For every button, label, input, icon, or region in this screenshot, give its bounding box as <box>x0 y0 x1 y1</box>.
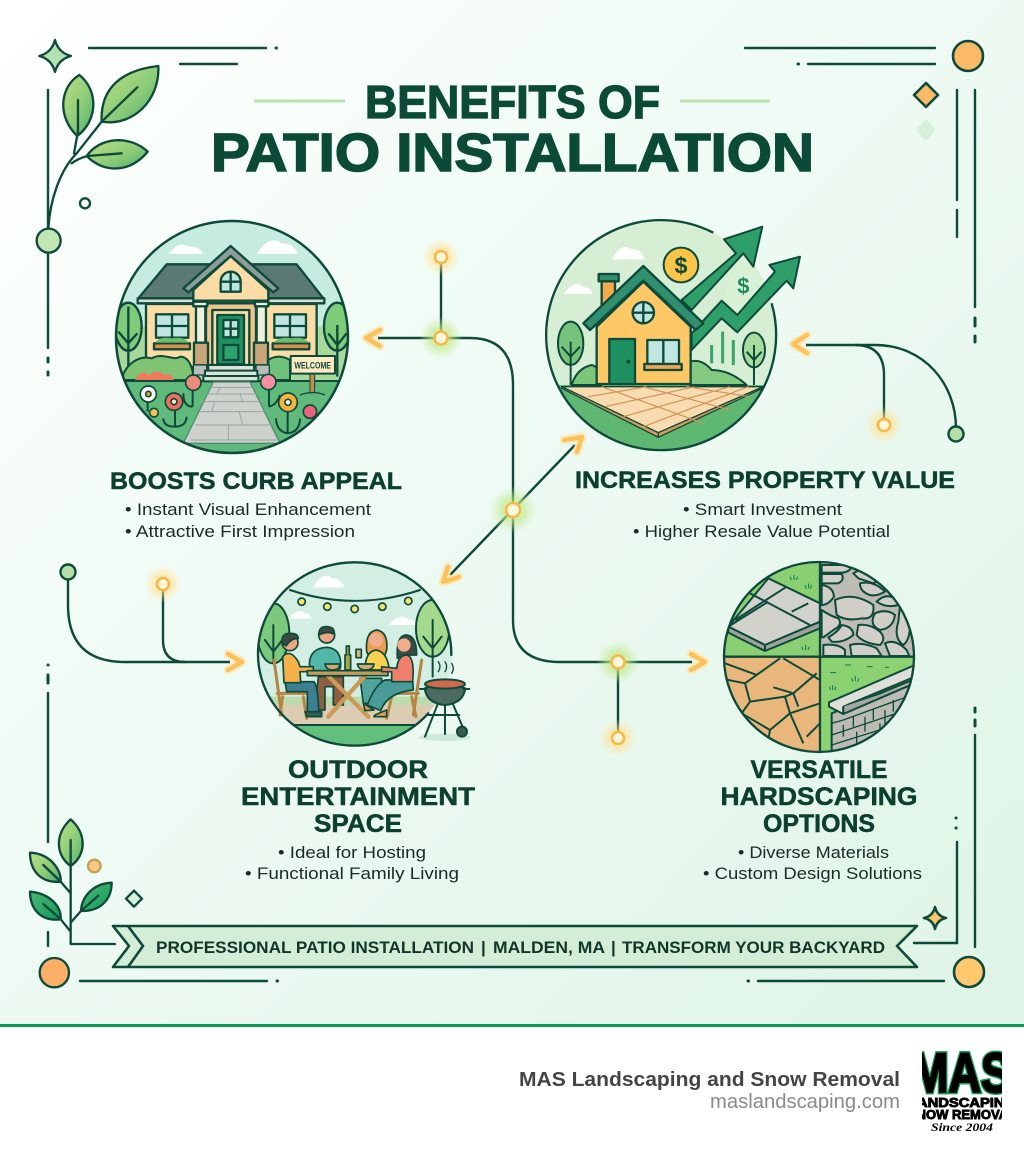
title <box>211 76 814 183</box>
bullets: entertainment <box>245 843 459 883</box>
frame: bottom-left corner <box>48 665 278 981</box>
bullets: hardscaping <box>703 843 922 883</box>
heading: increases property value: INCREASES PROPERTY VALUE <box>575 467 955 494</box>
frame: top-right corner <box>745 48 975 342</box>
bullets: hardscaping: • Custom Design Solutions <box>703 864 922 883</box>
logo: SNOW REMOVAL <box>908 1107 1016 1122</box>
illustration: house with rising arrows: $ <box>737 273 749 298</box>
icon: dollar coin <box>664 248 698 282</box>
illustration: house with rising arrows <box>543 217 800 457</box>
icon: barbecue grill <box>419 662 471 741</box>
banner ribbon <box>113 926 917 967</box>
person: teal shirt <box>309 627 343 710</box>
frame: bottom-right corner <box>748 708 975 981</box>
bullets: curb appeal <box>125 500 371 541</box>
panel: versatile hardscaping options <box>703 560 922 883</box>
banner ribbon: | <box>481 938 486 957</box>
heading: outdoor entertainment space: SPACE <box>314 810 402 838</box>
banner ribbon: | <box>611 938 616 957</box>
title: PATIO INSTALLATION <box>211 123 814 183</box>
heading: boosts curb appeal: BOOSTS CURB APPEAL <box>110 468 402 495</box>
footer company name: MAS Landscaping and Snow Removal <box>519 1068 900 1091</box>
upward arrow zigzag <box>692 257 800 350</box>
logo: Since 2004 <box>931 1120 993 1134</box>
banner ribbon: PROFESSIONAL PATIO INSTALLATION <box>156 938 474 957</box>
quadrant: concrete pavers <box>725 563 819 656</box>
heading: outdoor entertainment space <box>241 756 475 838</box>
frame: top-left corner <box>48 48 276 375</box>
upward arrow large <box>682 227 762 310</box>
footer website: maslandscaping.com <box>710 1091 900 1113</box>
heading: versatile hardscaping options: HARDSCAPING <box>720 783 918 811</box>
panel: increases property value <box>543 217 955 541</box>
person: orange shirt <box>282 633 322 717</box>
panel: boosts curb appeal <box>110 220 402 541</box>
connectors: right curves <box>806 345 956 428</box>
bullets: property value: • Higher Resale Value Potential <box>633 522 890 541</box>
illustration: four hardscape materials <box>720 560 920 753</box>
title: BENEFITS OF <box>365 76 660 128</box>
illustration: friends dining outdoors <box>250 553 471 753</box>
glow nodes <box>60 238 964 757</box>
icon: top-right circle and diamonds <box>914 41 983 139</box>
bullets: hardscaping: • Diverse Materials <box>738 843 889 862</box>
icon: bottom-right circle and star <box>924 907 984 987</box>
icon: bottom-left sprout <box>30 819 142 987</box>
quadrant: retaining wall <box>821 658 913 751</box>
bullets: curb appeal: • Attractive First Impression <box>125 522 355 541</box>
illustration: house with garden: WELCOME <box>294 360 331 370</box>
circle outline <box>546 220 776 450</box>
heading: versatile hardscaping options: OPTIONS <box>763 810 875 838</box>
icon: dollar coin: $ <box>674 252 687 278</box>
heading: versatile hardscaping options: VERSATILE <box>750 756 888 784</box>
bullets: entertainment: • Functional Family Living <box>245 864 459 883</box>
heading: outdoor entertainment space: ENTERTAINMENT <box>241 783 475 811</box>
heading: outdoor entertainment space: OUTDOOR <box>288 756 428 784</box>
connectors: left curves <box>68 572 230 662</box>
connectors: central network <box>378 257 692 738</box>
banner ribbon: TRANSFORM YOUR BACKYARD <box>622 938 885 957</box>
bullets: property value: • Smart Investment <box>683 500 842 519</box>
icon: top-left leafy branch <box>37 40 158 253</box>
banner ribbon: MALDEN, MA <box>493 938 605 957</box>
person: yellow shirt <box>360 630 389 703</box>
quadrant: natural stone <box>821 563 913 656</box>
logo: LANDSCAPING <box>908 1095 1016 1110</box>
footer band <box>0 1024 1024 1154</box>
circle outline <box>258 562 451 746</box>
bullets: property value <box>633 500 890 541</box>
bullets: curb appeal: • Instant Visual Enhancement <box>125 500 371 519</box>
bullets: entertainment: • Ideal for Hosting <box>278 843 426 862</box>
arrowheads <box>228 330 807 670</box>
chairs <box>274 660 422 718</box>
table with food <box>307 646 388 717</box>
heading: versatile hardscaping options <box>720 756 918 838</box>
person: coral shirt <box>363 635 417 717</box>
logo <box>922 1050 1002 1131</box>
quadrant: flagstone <box>720 657 820 753</box>
illustration: house with garden <box>113 220 353 461</box>
panel: outdoor entertainment space <box>241 553 475 883</box>
banknote <box>723 257 772 317</box>
